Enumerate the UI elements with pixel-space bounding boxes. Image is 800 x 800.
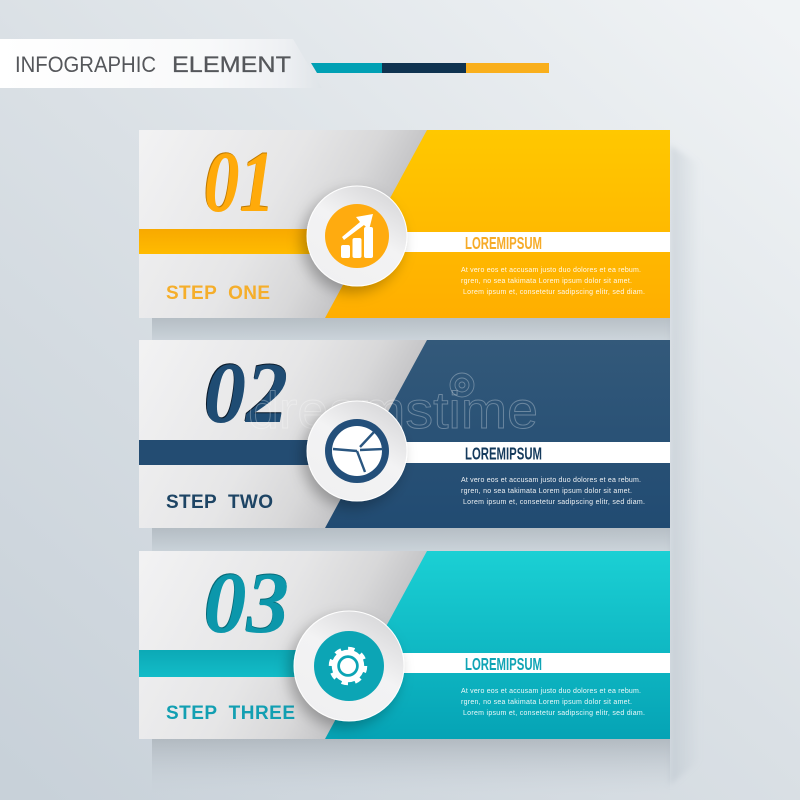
icon: rising bar chart in circle bbox=[307, 186, 407, 286]
icon: gear in circle bbox=[294, 611, 404, 721]
white band bbox=[400, 653, 670, 673]
panel: step three bbox=[139, 551, 670, 739]
panel shadows bbox=[152, 145, 700, 795]
body text: Lorem ipsum et, consetetur sadipscing elitr, sed diam. bbox=[463, 289, 645, 296]
panel: step two bbox=[139, 340, 670, 528]
body text: At vero eos et accusam justo duo dolores et ea rebum. bbox=[461, 688, 641, 695]
number 01: 01 bbox=[203, 132, 275, 229]
colour strip bbox=[139, 229, 314, 254]
colour strip bbox=[139, 650, 309, 677]
number 02: 02 bbox=[203, 343, 288, 440]
body text: Lorem ipsum et, consetetur sadipscing elitr, sed diam. bbox=[463, 499, 645, 506]
step label: STEP TWO bbox=[166, 492, 273, 513]
title bbox=[15, 52, 291, 77]
header banner bbox=[0, 39, 322, 88]
body text: At vero eos et accusam justo duo dolores et ea rebum. bbox=[461, 477, 641, 484]
body text bbox=[461, 267, 645, 296]
body text bbox=[461, 477, 645, 506]
body text: Lorem ipsum et, consetetur sadipscing elitr, sed diam. bbox=[463, 710, 645, 717]
white band bbox=[400, 232, 670, 252]
body text: rgren, no sea takimata Lorem ipsum dolor sit amet. bbox=[461, 699, 632, 706]
step label: STEP ONE bbox=[166, 283, 270, 304]
panel: step one bbox=[139, 130, 670, 318]
number 02: 02 bbox=[204, 344, 288, 441]
body text: At vero eos et accusam justo duo dolores et ea rebum. bbox=[461, 267, 641, 274]
body text: rgren, no sea takimata Lorem ipsum dolor sit amet. bbox=[461, 488, 632, 495]
white band bbox=[400, 442, 670, 463]
number 01: 01 bbox=[204, 133, 275, 230]
icon: pie chart in circle bbox=[307, 401, 407, 501]
number 03: 03 bbox=[204, 554, 289, 651]
body text bbox=[461, 688, 645, 717]
header colour bar bbox=[311, 63, 549, 73]
heading: LOREMIPSUM bbox=[465, 233, 542, 253]
heading: LOREMIPSUM bbox=[465, 654, 542, 674]
body text: rgren, no sea takimata Lorem ipsum dolor sit amet. bbox=[461, 278, 632, 285]
step label: STEP THREE bbox=[166, 703, 295, 724]
colour strip bbox=[139, 440, 314, 465]
heading: LOREMIPSUM bbox=[465, 444, 542, 464]
watermark: dreamstime bbox=[248, 382, 538, 440]
title: ELEMENT bbox=[172, 52, 291, 77]
number 03: 03 bbox=[203, 553, 289, 650]
title: INFOGRAPHIC bbox=[15, 52, 156, 77]
